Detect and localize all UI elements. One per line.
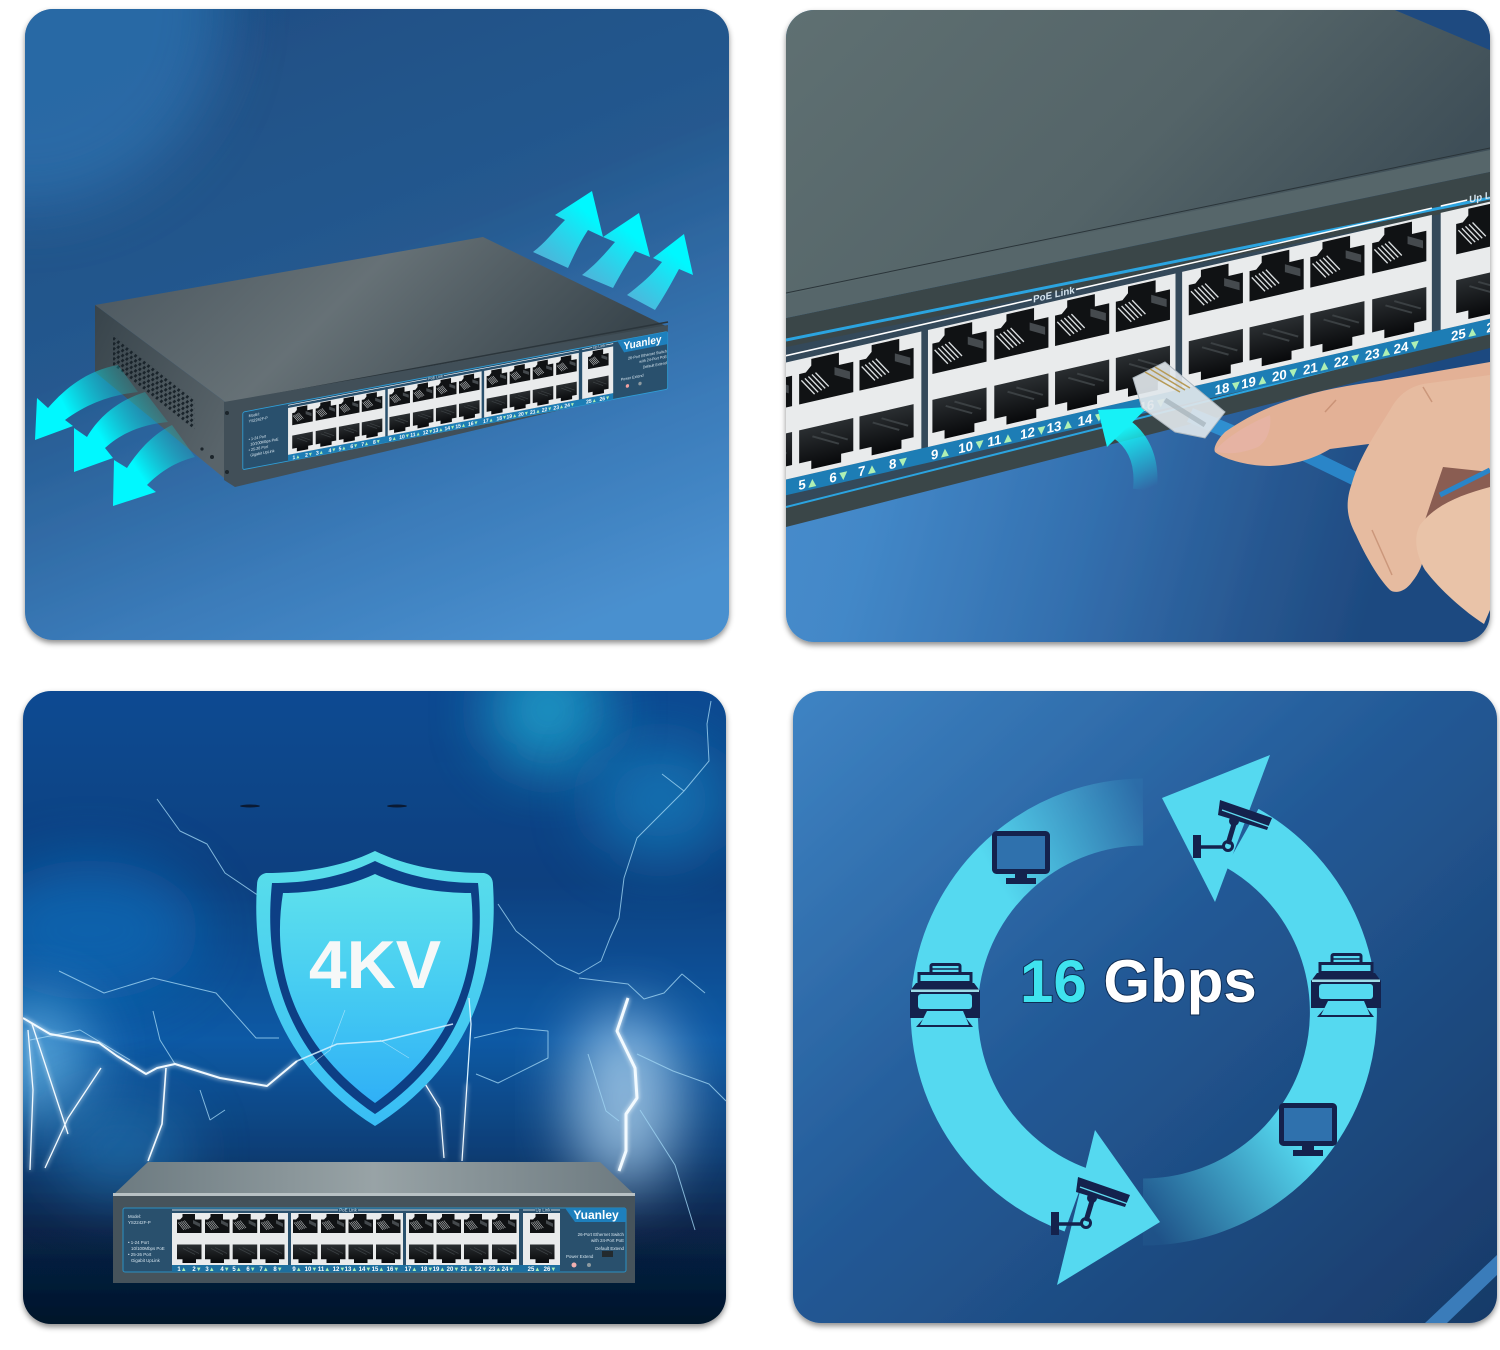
port rows and labels: 24▼ (1394, 336, 1421, 357)
front panel detail: 3▲ (316, 449, 324, 457)
front panel detail: 26▼ (544, 1267, 556, 1273)
port rows and labels: 9▲ (931, 443, 951, 463)
icon: printer (1311, 954, 1381, 1017)
front panel detail: YS2242F-P (128, 1220, 151, 1225)
front panel detail: 26-Port Ethernet Switch (578, 1232, 625, 1237)
port rows and labels: 6▼ (829, 466, 850, 486)
fingernail (1215, 415, 1270, 453)
front panel detail: Default Extend (595, 1246, 625, 1251)
port rows and labels: 19▲ (1241, 371, 1269, 392)
panel: plug and play (782, 9, 1494, 649)
port rows and labels: 21▲ (1303, 356, 1331, 378)
front panel detail: 19▲ (433, 1267, 445, 1273)
front panel detail: Model: (128, 1214, 141, 1219)
front panel detail: 16▼ (387, 1267, 399, 1273)
switch front (113, 1196, 635, 1283)
front panel detail: 23▲ (553, 404, 564, 412)
port rows and labels: 20▼ (1272, 364, 1300, 385)
front panel detail: Up Link (593, 343, 605, 350)
panel: 4KV lightning protection (0, 650, 730, 1324)
port rows and labels: 10▼ (958, 435, 986, 457)
switch top (95, 237, 668, 404)
shield: 4KV (256, 851, 494, 1126)
front panel detail: 11▲ (318, 1267, 330, 1273)
port rows and labels: 5▲ (798, 473, 819, 493)
speed label: 16 Gbps (1020, 948, 1257, 1015)
front panel detail: 1▲ (177, 1267, 187, 1273)
front panel detail: 2▼ (305, 451, 313, 459)
front panel detail: 26-Port Ethernet Switch (628, 349, 667, 361)
icon: camera (1193, 800, 1272, 858)
front panel detail: 12▼ (423, 429, 433, 437)
port rows and labels: 25▲ (1451, 323, 1479, 344)
front panel detail: Power Extend (621, 373, 644, 382)
front panel detail: 10/100Mbps PoE (250, 437, 279, 447)
front panel detail: Yuanley (573, 1208, 619, 1222)
switch: perspective view (95, 237, 668, 487)
front panel detail: • 1-24 Port (128, 1240, 150, 1245)
front panel detail: 8▼ (373, 439, 381, 446)
front panel detail: 14▼ (444, 424, 455, 433)
front panel detail: 13▲ (345, 1267, 357, 1273)
front panel detail: Up Link (536, 1208, 551, 1212)
icon: camera (1051, 1177, 1130, 1235)
port rows and labels: 14▼ (1078, 408, 1105, 429)
port rows and labels: 16▼ (1139, 394, 1167, 415)
front panel detail: PoE Link (339, 1208, 358, 1212)
lightning bolts behind shield (23, 701, 726, 1230)
front panel detail: 26▼ (600, 395, 610, 403)
middle finger (1348, 375, 1490, 592)
storm clouds (0, 650, 730, 1200)
front panel detail: • 1-24 Port (249, 434, 267, 442)
index finger (1214, 362, 1490, 466)
lightning over shield (297, 998, 471, 1084)
port rows and labels: 12▼ (1020, 421, 1048, 442)
switch front surface (786, 172, 1490, 527)
front panel detail: 23▲ (489, 1267, 501, 1273)
front panel detail: Default Extend (643, 361, 667, 370)
port rows and labels: 8▼ (889, 453, 910, 472)
front panel detail: Gigabit UpLink (131, 1258, 161, 1263)
switch top surface (786, 10, 1490, 318)
front panel detail: 15▲ (372, 1267, 384, 1273)
port rows and labels: 22▼ (1334, 349, 1362, 371)
front panel detail: 20▼ (518, 410, 529, 419)
arrows: hot air out, right side (533, 191, 693, 310)
port rows and labels: 23▲ (1365, 342, 1393, 364)
front panel detail: 13▲ (433, 427, 443, 435)
arrows: hot air out, left side (35, 365, 195, 506)
arrow: insert cable (1098, 407, 1148, 490)
icon: monitor (994, 834, 1048, 884)
front panel detail: 5▲ (339, 445, 346, 453)
port rows and labels: 7▲ (858, 460, 879, 479)
front panel detail: 10▼ (399, 433, 410, 441)
front panel detail: 20▼ (447, 1267, 459, 1273)
port rows and labels: 18▼ (1215, 377, 1242, 398)
front panel detail: 22▼ (475, 1267, 487, 1273)
switch front (224, 325, 668, 487)
front panel detail: 10▼ (305, 1267, 317, 1273)
front panel detail: 17▲ (483, 417, 494, 425)
front panel detail: 24▼ (564, 402, 575, 410)
circular arrows (944, 755, 1343, 1285)
panel: heat dissipation (0, 0, 729, 640)
front panel detail: 25▲ (528, 1267, 540, 1273)
front panel detail: 15▲ (455, 422, 466, 431)
front panel detail: 2▼ (192, 1267, 202, 1273)
front panel detail: 18▼ (496, 415, 507, 423)
front panel detail: • 25-26 Port (249, 445, 269, 453)
front panel detail: with 24-Port PoE (591, 1238, 624, 1243)
hand (1214, 362, 1490, 624)
front panel detail: 5▲ (232, 1267, 242, 1273)
front panel detail: 4▼ (329, 447, 336, 455)
port rows and labels (786, 192, 1490, 496)
port rows and labels: 11▲ (987, 429, 1014, 450)
port rows and labels: PoE Link (1033, 285, 1075, 306)
front panel detail: 9▲ (292, 1267, 302, 1273)
front panel detail (243, 331, 668, 471)
shield label: 4KV (309, 927, 441, 1003)
switch side with vents (95, 305, 235, 487)
front panel detail: Power Extend (566, 1254, 594, 1259)
front panel detail: 6▼ (350, 443, 358, 450)
front panel detail: 14▼ (359, 1267, 371, 1273)
front panel detail: 7▲ (361, 441, 369, 448)
front panel detail: 3▲ (205, 1267, 215, 1273)
cable and RJ45 connector (1133, 362, 1372, 487)
panel: 16 Gbps backplane (793, 691, 1497, 1323)
front panel detail: 21▲ (461, 1267, 473, 1273)
front panel detail: 25▲ (586, 398, 597, 406)
front panel detail: Model: (249, 412, 260, 418)
port rows and labels: 13▲ (1047, 415, 1075, 436)
front panel detail: 1▲ (293, 454, 300, 461)
front panel detail: with 24-Port PoE (639, 355, 667, 364)
third finger (1416, 487, 1490, 624)
front panel detail: 11▲ (410, 431, 421, 439)
front panel detail: 9▲ (389, 436, 397, 443)
front panel detail: 19▲ (507, 413, 517, 421)
icon: printer (910, 964, 980, 1027)
front panel detail: 6▼ (246, 1267, 256, 1273)
front panel detail: 10/100Mbps PoE (131, 1246, 165, 1251)
icon: monitor (1282, 1106, 1334, 1156)
front panel detail: 8▼ (273, 1267, 283, 1273)
front panel detail: 16▼ (468, 420, 479, 428)
marks in the sky (240, 804, 407, 808)
front panel detail: 24▼ (502, 1267, 514, 1273)
front panel detail: 4▼ (220, 1267, 230, 1273)
front panel detail (123, 1208, 626, 1273)
front panel detail: 18▼ (421, 1267, 433, 1273)
front panel detail: 22▼ (542, 406, 552, 414)
switch: front view (113, 1162, 635, 1283)
front panel detail: Gigabit UpLink (250, 449, 275, 458)
front panel detail: YS2242F-P (249, 416, 268, 424)
front panel detail: Yuanley (624, 333, 662, 353)
switch top (113, 1162, 635, 1195)
front panel detail: 17▲ (405, 1267, 417, 1273)
front panel detail: 21▲ (530, 408, 541, 416)
front panel detail: PoE Link (428, 374, 443, 381)
front panel detail: 12▼ (333, 1267, 345, 1273)
front panel detail: • 25-26 Port (128, 1252, 152, 1257)
front panel detail: 7▲ (259, 1267, 269, 1273)
